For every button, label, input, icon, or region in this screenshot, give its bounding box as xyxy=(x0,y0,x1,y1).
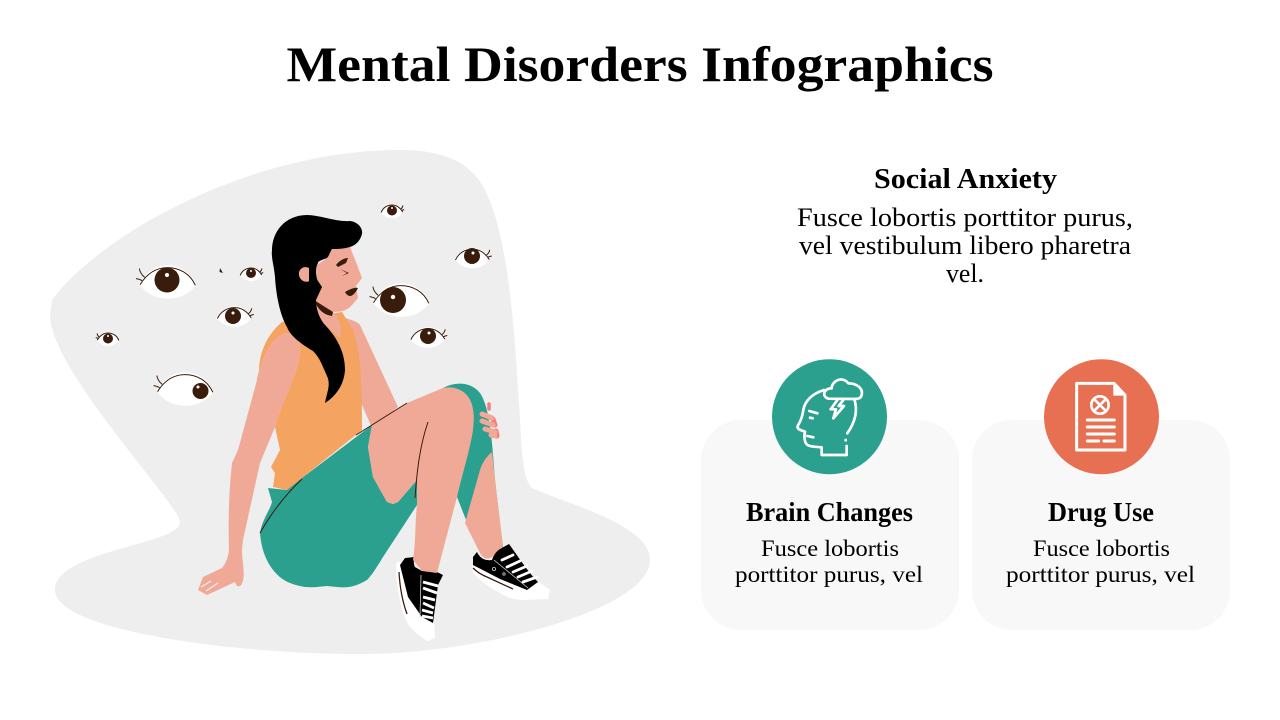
icon: brain storm head xyxy=(772,359,887,474)
block: social anxiety xyxy=(797,164,1133,288)
neck and face xyxy=(315,247,362,338)
text block xyxy=(1006,536,1196,588)
text block: porttitor purus, vel xyxy=(1006,562,1196,588)
text block: vel vestibulum libero pharetra xyxy=(799,231,1131,260)
eye: small top xyxy=(381,204,404,218)
text block: Fusce lobortis xyxy=(1033,536,1170,562)
text block: vel. xyxy=(946,259,984,288)
ear xyxy=(299,267,309,282)
text block: Fusce lobortis xyxy=(761,536,899,562)
text block xyxy=(797,203,1133,288)
eye: large centre xyxy=(370,283,429,317)
title: Mental Disorders Infographics xyxy=(286,36,994,92)
near leg xyxy=(368,387,474,573)
card xyxy=(701,420,959,630)
eye: large lower left xyxy=(154,372,213,406)
eye: medium right xyxy=(455,248,492,268)
leg fold lines xyxy=(260,403,428,533)
necklace xyxy=(314,300,333,316)
near arm xyxy=(198,333,300,595)
heading: Drug Use xyxy=(1048,497,1154,527)
far leg xyxy=(465,452,503,559)
shorts xyxy=(260,425,417,587)
top xyxy=(257,312,362,490)
hand on knee xyxy=(482,404,497,436)
heading: Social Anxiety xyxy=(874,164,1057,195)
eye: speck xyxy=(220,268,223,273)
far leg shorts xyxy=(443,384,503,548)
eye: medium lower right xyxy=(411,327,447,348)
eye: small far left xyxy=(96,332,119,346)
hand finger gaps xyxy=(201,581,218,591)
eye: medium centre xyxy=(217,306,254,327)
floating eyes xyxy=(96,204,492,406)
hair xyxy=(272,215,362,403)
woman figure xyxy=(198,215,550,641)
heading: Brain Changes xyxy=(746,497,913,527)
card xyxy=(972,420,1230,630)
text block: porttitor purus, vel xyxy=(735,562,923,588)
far arm xyxy=(345,318,398,428)
near shoe xyxy=(396,557,443,641)
icon: document xyxy=(1044,359,1159,474)
text block: Fusce lobortis porttitor purus, xyxy=(797,203,1133,232)
far shoe xyxy=(472,544,550,600)
panel: brain changes xyxy=(701,359,959,630)
text block xyxy=(735,536,923,588)
background blob xyxy=(50,150,650,654)
eye: large left xyxy=(136,265,196,299)
face features xyxy=(336,258,358,296)
panel: drug use xyxy=(972,359,1230,630)
eye: small centre xyxy=(240,267,263,281)
